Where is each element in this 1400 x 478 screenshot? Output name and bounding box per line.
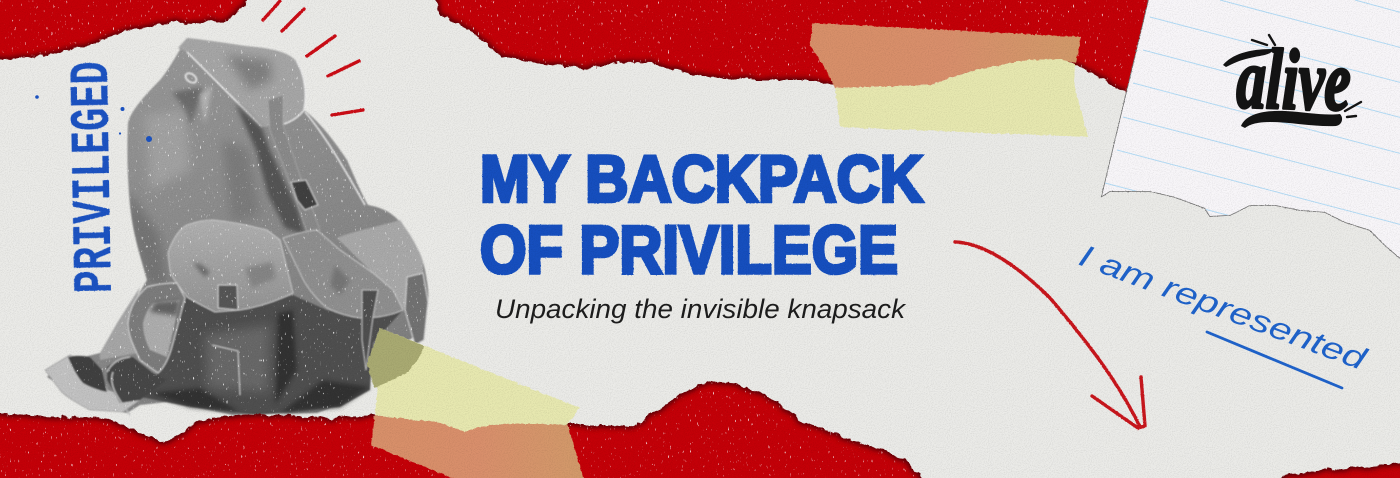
blue ink dots — [35, 95, 152, 142]
left side strap loop — [128, 283, 185, 373]
lighter wear on pocket — [205, 325, 270, 392]
backpack main sack — [47, 38, 428, 415]
red emphasis marks around backpack — [263, 1, 363, 115]
central strap — [268, 95, 320, 235]
right pocket flap — [283, 230, 403, 318]
white scuff specks on backpack — [40, 30, 435, 420]
alive logo — [1223, 30, 1361, 129]
red arrow — [955, 242, 1145, 428]
strap loop opening — [143, 300, 180, 357]
notebook paper sheet — [1102, 0, 1400, 258]
lower pocket dark patches — [150, 310, 370, 413]
title line one: MY BACKPACK — [480, 142, 923, 216]
strap buckle — [291, 180, 318, 210]
bottom tape: yellow part over paper — [367, 328, 580, 432]
torn red paper: top centre — [429, 0, 1170, 110]
strap loop inner shadow — [150, 300, 180, 316]
lid edge highlight — [187, 52, 305, 127]
subtitle: Unpacking the invisible knapsack — [495, 294, 907, 324]
flap shadows — [193, 262, 350, 295]
notebook paper shadow — [1102, 0, 1400, 258]
right pocket strap tab — [362, 290, 378, 370]
handwritten phrase: I am represented — [1075, 238, 1373, 377]
foot dark inside — [68, 356, 107, 392]
lid shadow patches — [225, 55, 272, 90]
bottom torn red paper — [0, 381, 928, 478]
top tape: yellow part over paper — [835, 59, 1088, 137]
notebook ruled lines — [1105, 0, 1400, 225]
bottom tape: orange part over red — [371, 415, 584, 478]
backpack top lid — [178, 38, 305, 127]
left lower sack — [100, 287, 140, 360]
torn red paper: top left — [0, 0, 252, 60]
left pocket strap tab — [218, 285, 238, 310]
lower pocket body — [140, 293, 403, 415]
bottom foot of pack — [45, 355, 140, 412]
metal eyelet ring — [184, 71, 198, 85]
hanging strap end — [107, 357, 130, 415]
left pocket flap — [168, 220, 293, 312]
top tape: orange part over red — [810, 23, 1081, 88]
torn red paper: bottom right corner — [1278, 461, 1400, 478]
logo top swash — [1223, 49, 1272, 67]
right side buckle strap — [405, 273, 428, 345]
backpack shading and folds — [128, 85, 365, 290]
arrow head — [1092, 377, 1145, 428]
title line two: OF PRIVILEGE — [480, 212, 898, 288]
tangled buckle straps — [107, 357, 167, 403]
left pocket lower seam — [212, 345, 240, 395]
bottom tape: olive overlap on backpack — [367, 328, 424, 388]
main title — [480, 142, 923, 288]
far right pocket flap — [337, 220, 423, 310]
underline stroke — [1207, 332, 1342, 388]
backpack illustration — [45, 38, 428, 415]
logo accent ticks — [1252, 35, 1361, 117]
logo swash underline — [1241, 111, 1342, 128]
arrow shaft — [955, 242, 1140, 427]
torn notebook paper — [1102, 0, 1400, 263]
dark gap under the lid — [235, 103, 305, 235]
